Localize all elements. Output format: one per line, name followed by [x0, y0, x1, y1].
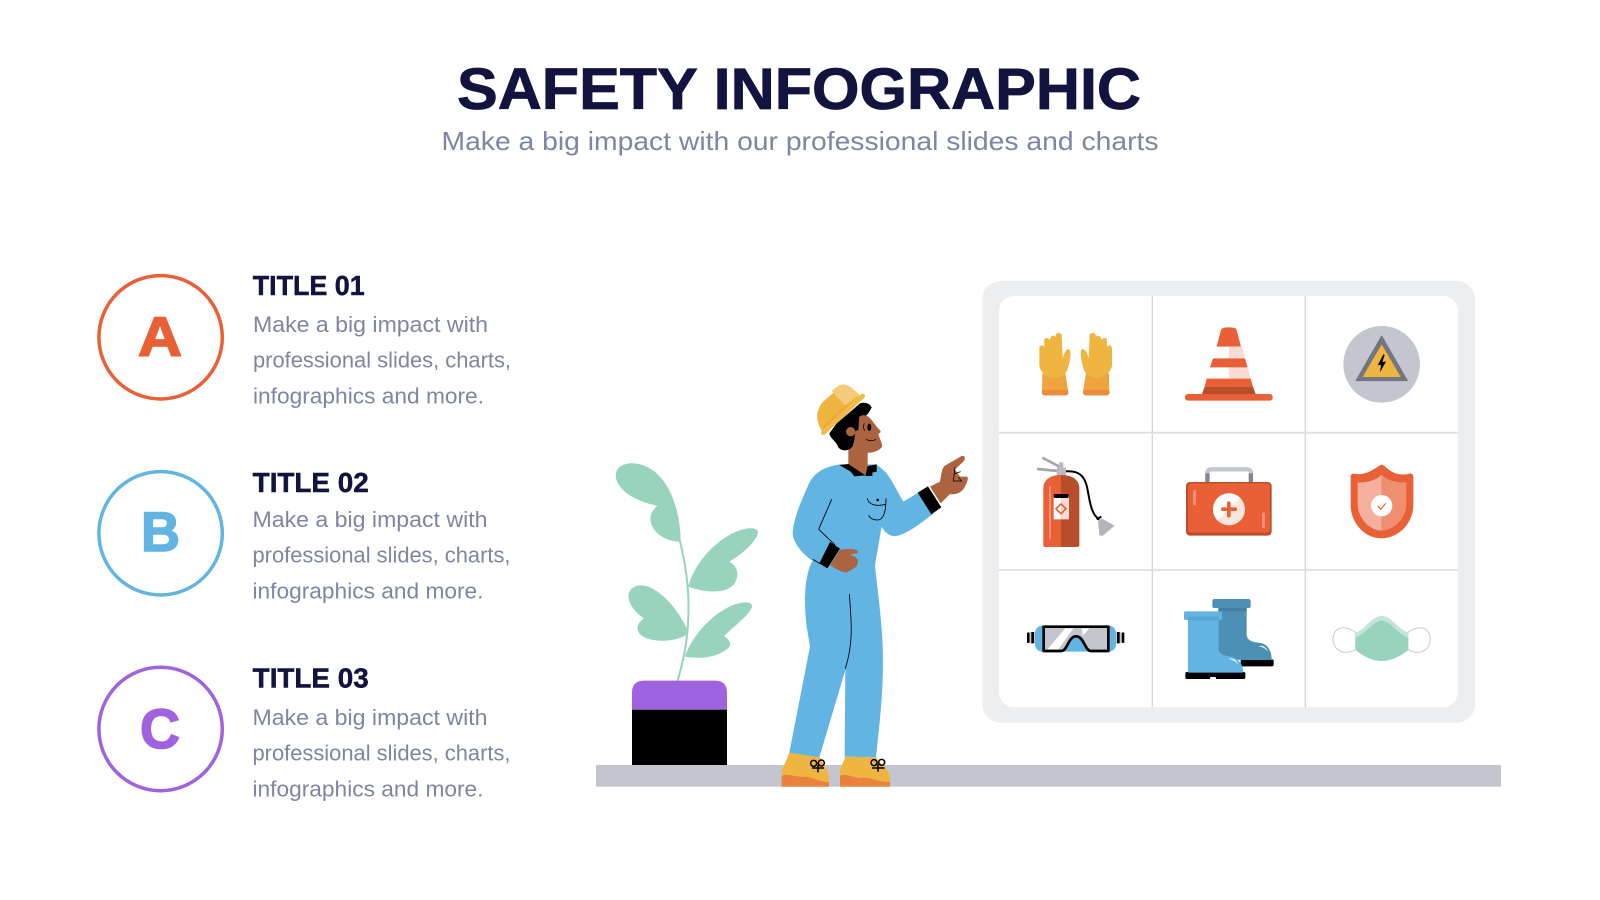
- text block B: professional slides, charts,: [252, 543, 510, 568]
- shoes: [782, 752, 890, 787]
- badge A: A: [138, 305, 182, 368]
- icon: shield: [1351, 465, 1413, 538]
- text block A: Make a big impact with: [253, 312, 488, 337]
- text block B: [252, 507, 510, 604]
- panel: item C: [99, 663, 510, 801]
- icon: rubber boots: [1184, 599, 1274, 679]
- badge A: [99, 276, 222, 399]
- heading: title 03: TITLE 03: [253, 663, 369, 694]
- cuffs: [819, 486, 941, 568]
- heading: title 02: TITLE 02: [253, 467, 369, 498]
- badge B: B: [141, 500, 180, 563]
- icon: fire extinguisher: [1037, 458, 1115, 547]
- text block C: professional slides, charts,: [252, 741, 510, 766]
- icon: first aid kit: [1186, 469, 1272, 536]
- plant pot: [632, 681, 727, 765]
- icon: electrical hazard sign: [1343, 326, 1420, 403]
- badge C: C: [140, 697, 180, 760]
- collar: [839, 464, 877, 476]
- text block A: professional slides, charts,: [253, 348, 511, 373]
- illustration: worker pointing at board: [782, 384, 968, 787]
- badge B: [99, 472, 222, 595]
- title: SAFETY INFOGRAPHIC: [457, 57, 1141, 122]
- head: [829, 403, 882, 453]
- icon: traffic cone: [1185, 327, 1273, 401]
- text block C: infographics and more.: [252, 776, 484, 801]
- neck: [848, 445, 868, 475]
- icon: safety goggles: [1027, 626, 1124, 652]
- coverall suit: [789, 464, 933, 757]
- panel: item B: [99, 467, 510, 604]
- text block C: [252, 705, 510, 801]
- subtitle: Make a big impact with our professional slides and charts: [442, 126, 1158, 156]
- panel: safety equipment board: [982, 281, 1475, 723]
- icon: gloves: [1039, 333, 1112, 395]
- icon: face mask: [1333, 616, 1430, 661]
- suit seams: [813, 498, 886, 669]
- badge C: [99, 667, 222, 791]
- illustration: potted plant: [616, 463, 758, 765]
- text block C: Make a big impact with: [252, 705, 488, 730]
- text block A: [253, 312, 511, 409]
- ground bar: [596, 765, 1501, 787]
- heading: title 01: TITLE 01: [253, 270, 365, 301]
- hard hat: [817, 384, 863, 433]
- text block A: infographics and more.: [253, 384, 484, 409]
- panel: item A: [99, 270, 511, 409]
- text block B: Make a big impact with: [252, 507, 488, 532]
- text block B: infographics and more.: [252, 579, 484, 604]
- resting hand: [830, 549, 858, 573]
- pointing hand: [930, 456, 968, 503]
